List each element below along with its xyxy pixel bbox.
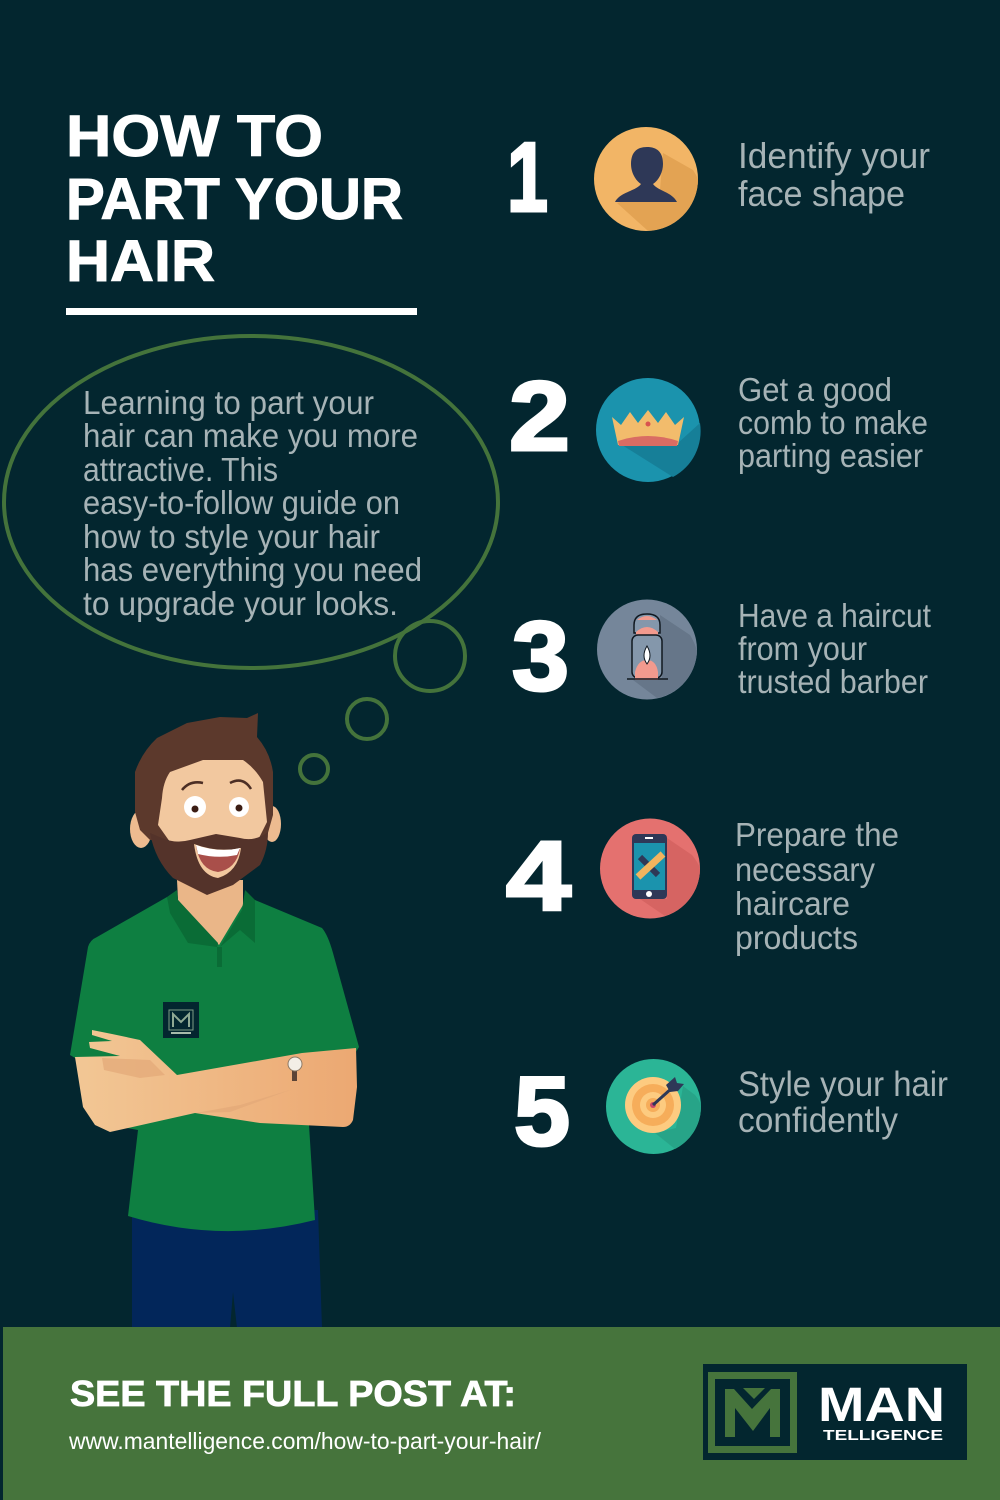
icon: crown <box>596 378 701 482</box>
step text: trusted barber <box>738 663 928 700</box>
intro paragraph: easy-to-follow guide on <box>83 484 400 521</box>
trousers <box>132 1210 322 1328</box>
hair <box>135 713 273 840</box>
footer url: www.mantelligence.com/how-to-part-your-hair/ <box>68 1428 542 1454</box>
intro paragraph: hair can make you more <box>83 417 418 454</box>
number 1: 1 <box>507 122 548 232</box>
step text: Identify your <box>738 135 930 176</box>
footer band <box>3 1327 1000 1500</box>
step text: comb to make <box>738 404 928 441</box>
beard <box>150 832 268 895</box>
step text: Prepare the <box>735 816 899 853</box>
icon: person silhouette <box>594 127 698 231</box>
step text <box>738 371 928 474</box>
eyes <box>184 796 249 818</box>
intro paragraph: how to style your hair <box>83 518 380 555</box>
step text: haircare <box>735 885 850 922</box>
intro paragraph: Learning to part your <box>83 384 374 421</box>
step text: confidently <box>738 1101 898 1140</box>
hand shadow <box>102 1058 290 1113</box>
footer heading: SEE THE FULL POST AT: <box>70 1373 516 1414</box>
intro paragraph: attractive. This <box>83 451 278 488</box>
step 3 <box>512 597 931 711</box>
step text: products <box>735 919 858 956</box>
number 3: 3 <box>512 601 569 711</box>
logo: MAN <box>818 1379 945 1432</box>
neck <box>177 880 243 945</box>
logo: TELLIGENCE <box>823 1427 943 1444</box>
intro paragraph: has everything you need <box>83 551 422 588</box>
step text: from your <box>738 630 867 667</box>
step text <box>735 816 899 956</box>
step 2 <box>509 361 928 482</box>
icon: phone <box>600 818 700 918</box>
step text: necessary <box>735 851 875 888</box>
intro paragraph: to upgrade your looks. <box>83 585 398 622</box>
number 5: 5 <box>514 1056 570 1166</box>
title: PART YOUR <box>66 167 403 232</box>
logo <box>703 1364 967 1460</box>
illustration: bearded man with crossed arms <box>70 713 359 1328</box>
step text <box>738 597 931 700</box>
number 2: 2 <box>509 361 570 471</box>
shirt placket <box>217 947 222 967</box>
eyebrows <box>182 781 251 790</box>
icon: target and dart <box>606 1059 701 1154</box>
mouth <box>194 844 241 878</box>
title: HAIR <box>66 229 215 294</box>
step 1 <box>507 122 930 232</box>
watch <box>288 1057 302 1081</box>
title: HOW TO <box>66 104 323 169</box>
collar <box>167 890 255 947</box>
shirt badge <box>163 1002 199 1038</box>
icon: lantern <box>597 600 697 700</box>
shirt <box>70 897 359 1231</box>
face <box>158 760 267 842</box>
step 5 <box>514 1056 948 1166</box>
step text: Style your hair <box>738 1065 948 1104</box>
intro paragraph <box>83 384 422 622</box>
step 4 <box>506 816 899 956</box>
step text: Get a good <box>738 371 892 408</box>
step text <box>738 135 930 214</box>
thought bubble <box>4 336 498 783</box>
number 4: 4 <box>506 821 571 931</box>
arms <box>75 1030 357 1132</box>
title <box>66 104 403 294</box>
step text <box>738 1065 948 1140</box>
ears <box>130 806 281 848</box>
step text: Have a haircut <box>738 597 931 634</box>
step text: face shape <box>738 173 905 214</box>
step text: parting easier <box>738 437 923 474</box>
